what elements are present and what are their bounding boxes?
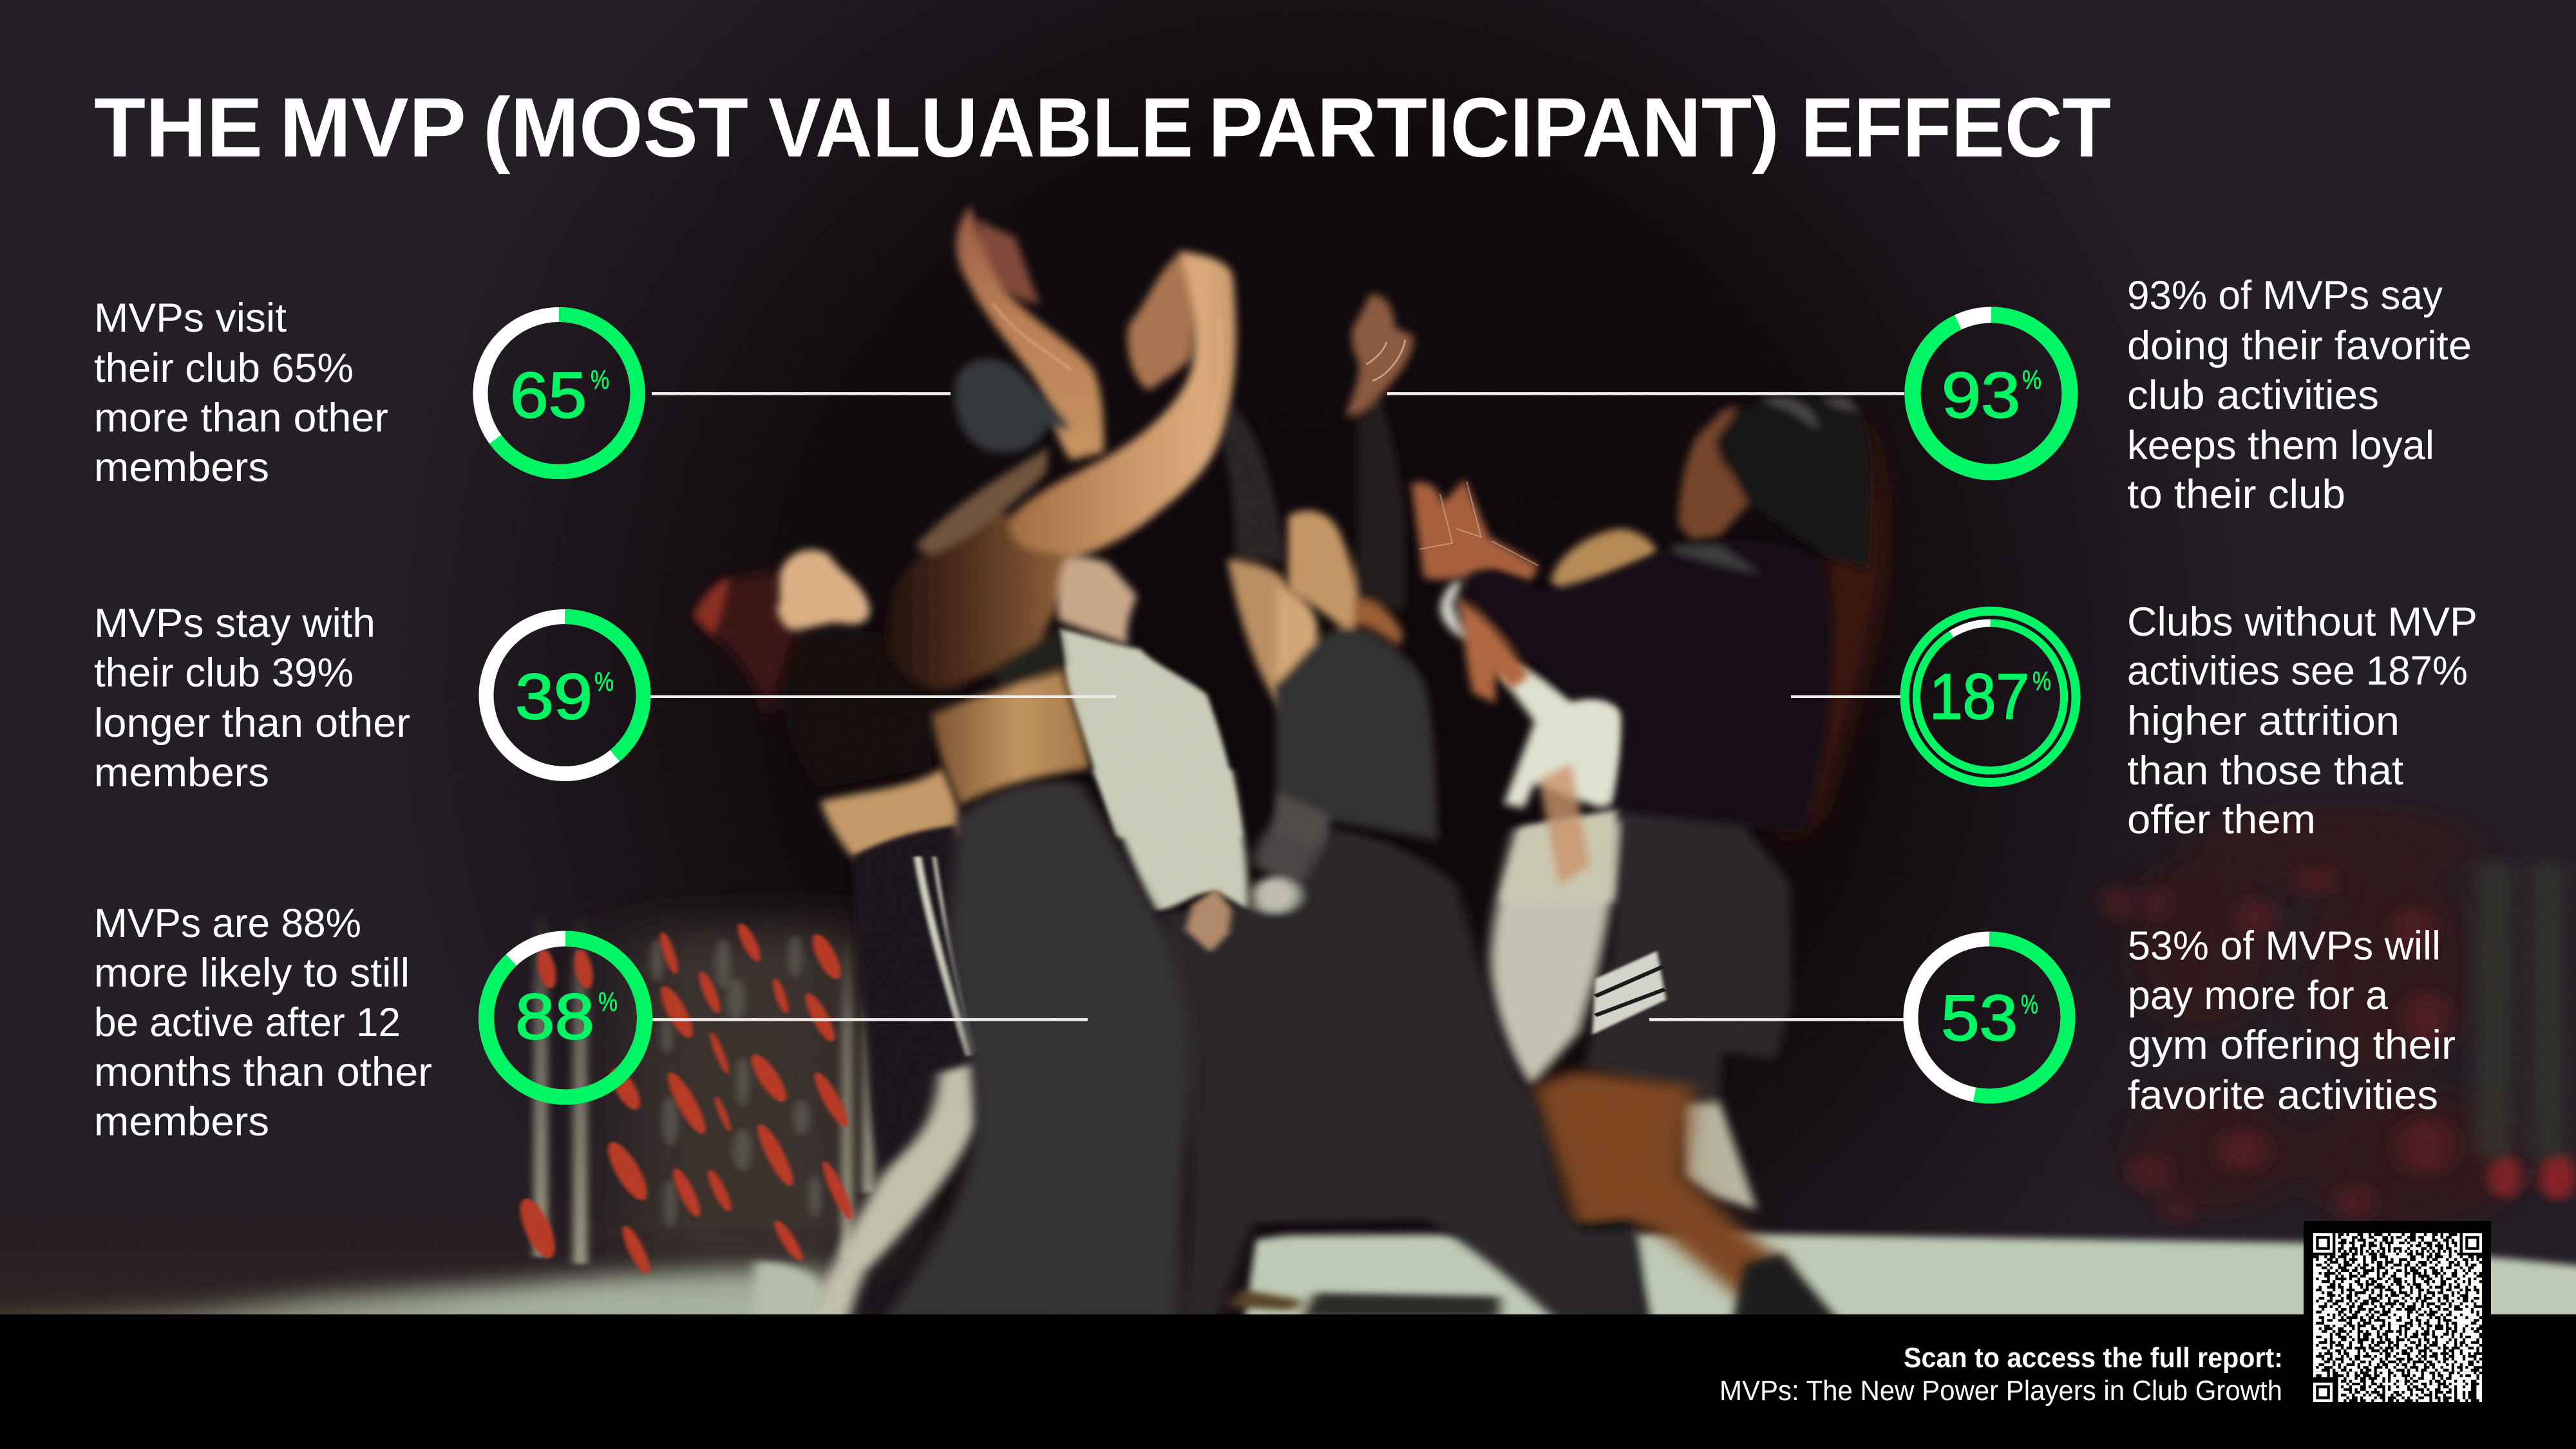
footer call to action: MVPs: The New Power Players in Club Growth [1719, 1375, 2282, 1406]
donut: 88 percent: 88 [515, 981, 594, 1053]
donut: 53 percent: 53 [1941, 982, 2018, 1054]
text: loyalty description [2127, 273, 2472, 517]
text: pay more description: gym offering their [2128, 1023, 2456, 1068]
donut: 93 percent: % [2022, 365, 2041, 395]
floor [0, 1233, 2576, 1346]
stat: visits 65% [94, 296, 951, 490]
text: retention description: MVPs are 88% [94, 901, 361, 946]
dancer: right, ponytail and black jacket (upper) [1411, 395, 1886, 834]
dancer: centre, black top with raised arms [1161, 294, 1642, 1320]
background: left weight rack with red plates [513, 910, 880, 1275]
donut: 88 percent: % [598, 987, 618, 1017]
title: (MOST [483, 80, 748, 175]
dancer: foreground, tan skin with raised arms and grey sweatpants [884, 205, 1236, 1320]
stat: attrition 187% [1791, 600, 2477, 842]
text: attrition description [2127, 600, 2477, 842]
text: tenure description: longer than other [94, 701, 410, 746]
leader line [1387, 392, 1904, 395]
text: pay more description: favorite activities [2128, 1073, 2438, 1118]
dancer: right, black jacket [1440, 540, 1832, 833]
text: tenure description: MVPs stay with [94, 601, 375, 646]
footer band [0, 1314, 2576, 1449]
footer call to action: Scan to access the full report: [1904, 1342, 2283, 1374]
background: right weight rack haze [2105, 806, 2576, 1228]
stat: loyalty 93% [1387, 273, 2472, 517]
text: tenure description: members [94, 750, 269, 795]
text: attrition description: than those that [2127, 748, 2404, 793]
stat: tenure 39% [94, 601, 1116, 795]
text: visits description: MVPs visit [94, 296, 287, 341]
leader line [652, 1018, 1088, 1021]
donut: 88 percent [486, 939, 645, 1097]
text: loyalty description: keeps them loyal [2127, 423, 2434, 468]
text: loyalty description: club activities [2127, 373, 2379, 418]
donut: 65 percent: % [591, 365, 609, 395]
donut: 65 percent [480, 314, 638, 471]
dancer: right, skirt and legs [1531, 811, 1839, 1321]
title: PARTICIPANT) [1208, 80, 1779, 175]
donut: 53 percent [1911, 939, 2068, 1096]
title: VALUABLE [768, 80, 1193, 175]
dancer: man in pale grey shirt [1059, 629, 1248, 952]
text: pay more description: pay more for a [2128, 973, 2389, 1018]
text: loyalty description: doing their favorite [2127, 323, 2472, 368]
stat: retention 88% [94, 901, 1088, 1144]
double donut: 187 percent: 187 [1929, 661, 2029, 733]
title [94, 80, 2111, 175]
dancer: white fabric and trousers [1490, 665, 1628, 1087]
leader line [1791, 696, 1900, 698]
text: retention description: months than other [94, 1050, 432, 1095]
text: tenure description: their club 39% [94, 650, 354, 696]
text: visits description [94, 296, 388, 490]
donut: 93 percent: 93 [1942, 359, 2020, 431]
footer call to action [1719, 1342, 2283, 1406]
double donut: 187 percent: % [2032, 666, 2051, 696]
title: EFFECT [1801, 80, 2111, 175]
double donut: 187 percent [1905, 611, 2076, 782]
text: attrition description: activities see 187% [2127, 649, 2468, 694]
text: loyalty description: to their club [2127, 472, 2345, 517]
text: visits description: their club 65% [94, 346, 354, 391]
text: retention description [94, 901, 432, 1144]
title: THE [94, 80, 263, 175]
donut: 93 percent [1913, 315, 2070, 472]
text: attrition description: offer them [2127, 797, 2316, 842]
leader line [652, 392, 951, 395]
text: retention description: members [94, 1099, 269, 1144]
stat: pay more 53% [1649, 923, 2456, 1118]
text: pay more description: 53% of MVPs will [2128, 923, 2441, 969]
text: tenure description [94, 601, 410, 795]
leader line [1649, 1018, 1904, 1021]
donut: 53 percent: % [2021, 989, 2038, 1019]
text: attrition description: higher attrition [2127, 699, 2400, 744]
dancer: left, red hair and striped track pants [694, 550, 979, 1320]
text: retention description: more likely to still [94, 951, 410, 996]
text: visits description: more than other [94, 395, 388, 440]
text: pay more description [2128, 923, 2456, 1118]
title: MVP [279, 80, 466, 175]
leader line [650, 696, 1116, 698]
text: visits description: members [94, 445, 269, 490]
donut: 39 percent: 39 [515, 661, 592, 733]
text: retention description: be active after 12 [94, 1000, 401, 1045]
text: attrition description: Clubs without MVP [2127, 600, 2477, 645]
donut: 65 percent: 65 [510, 359, 587, 431]
QR code [2304, 1221, 2491, 1449]
donut: 39 percent [486, 617, 643, 774]
donut: 39 percent: % [594, 667, 614, 697]
text: loyalty description: 93% of MVPs say [2127, 273, 2443, 318]
